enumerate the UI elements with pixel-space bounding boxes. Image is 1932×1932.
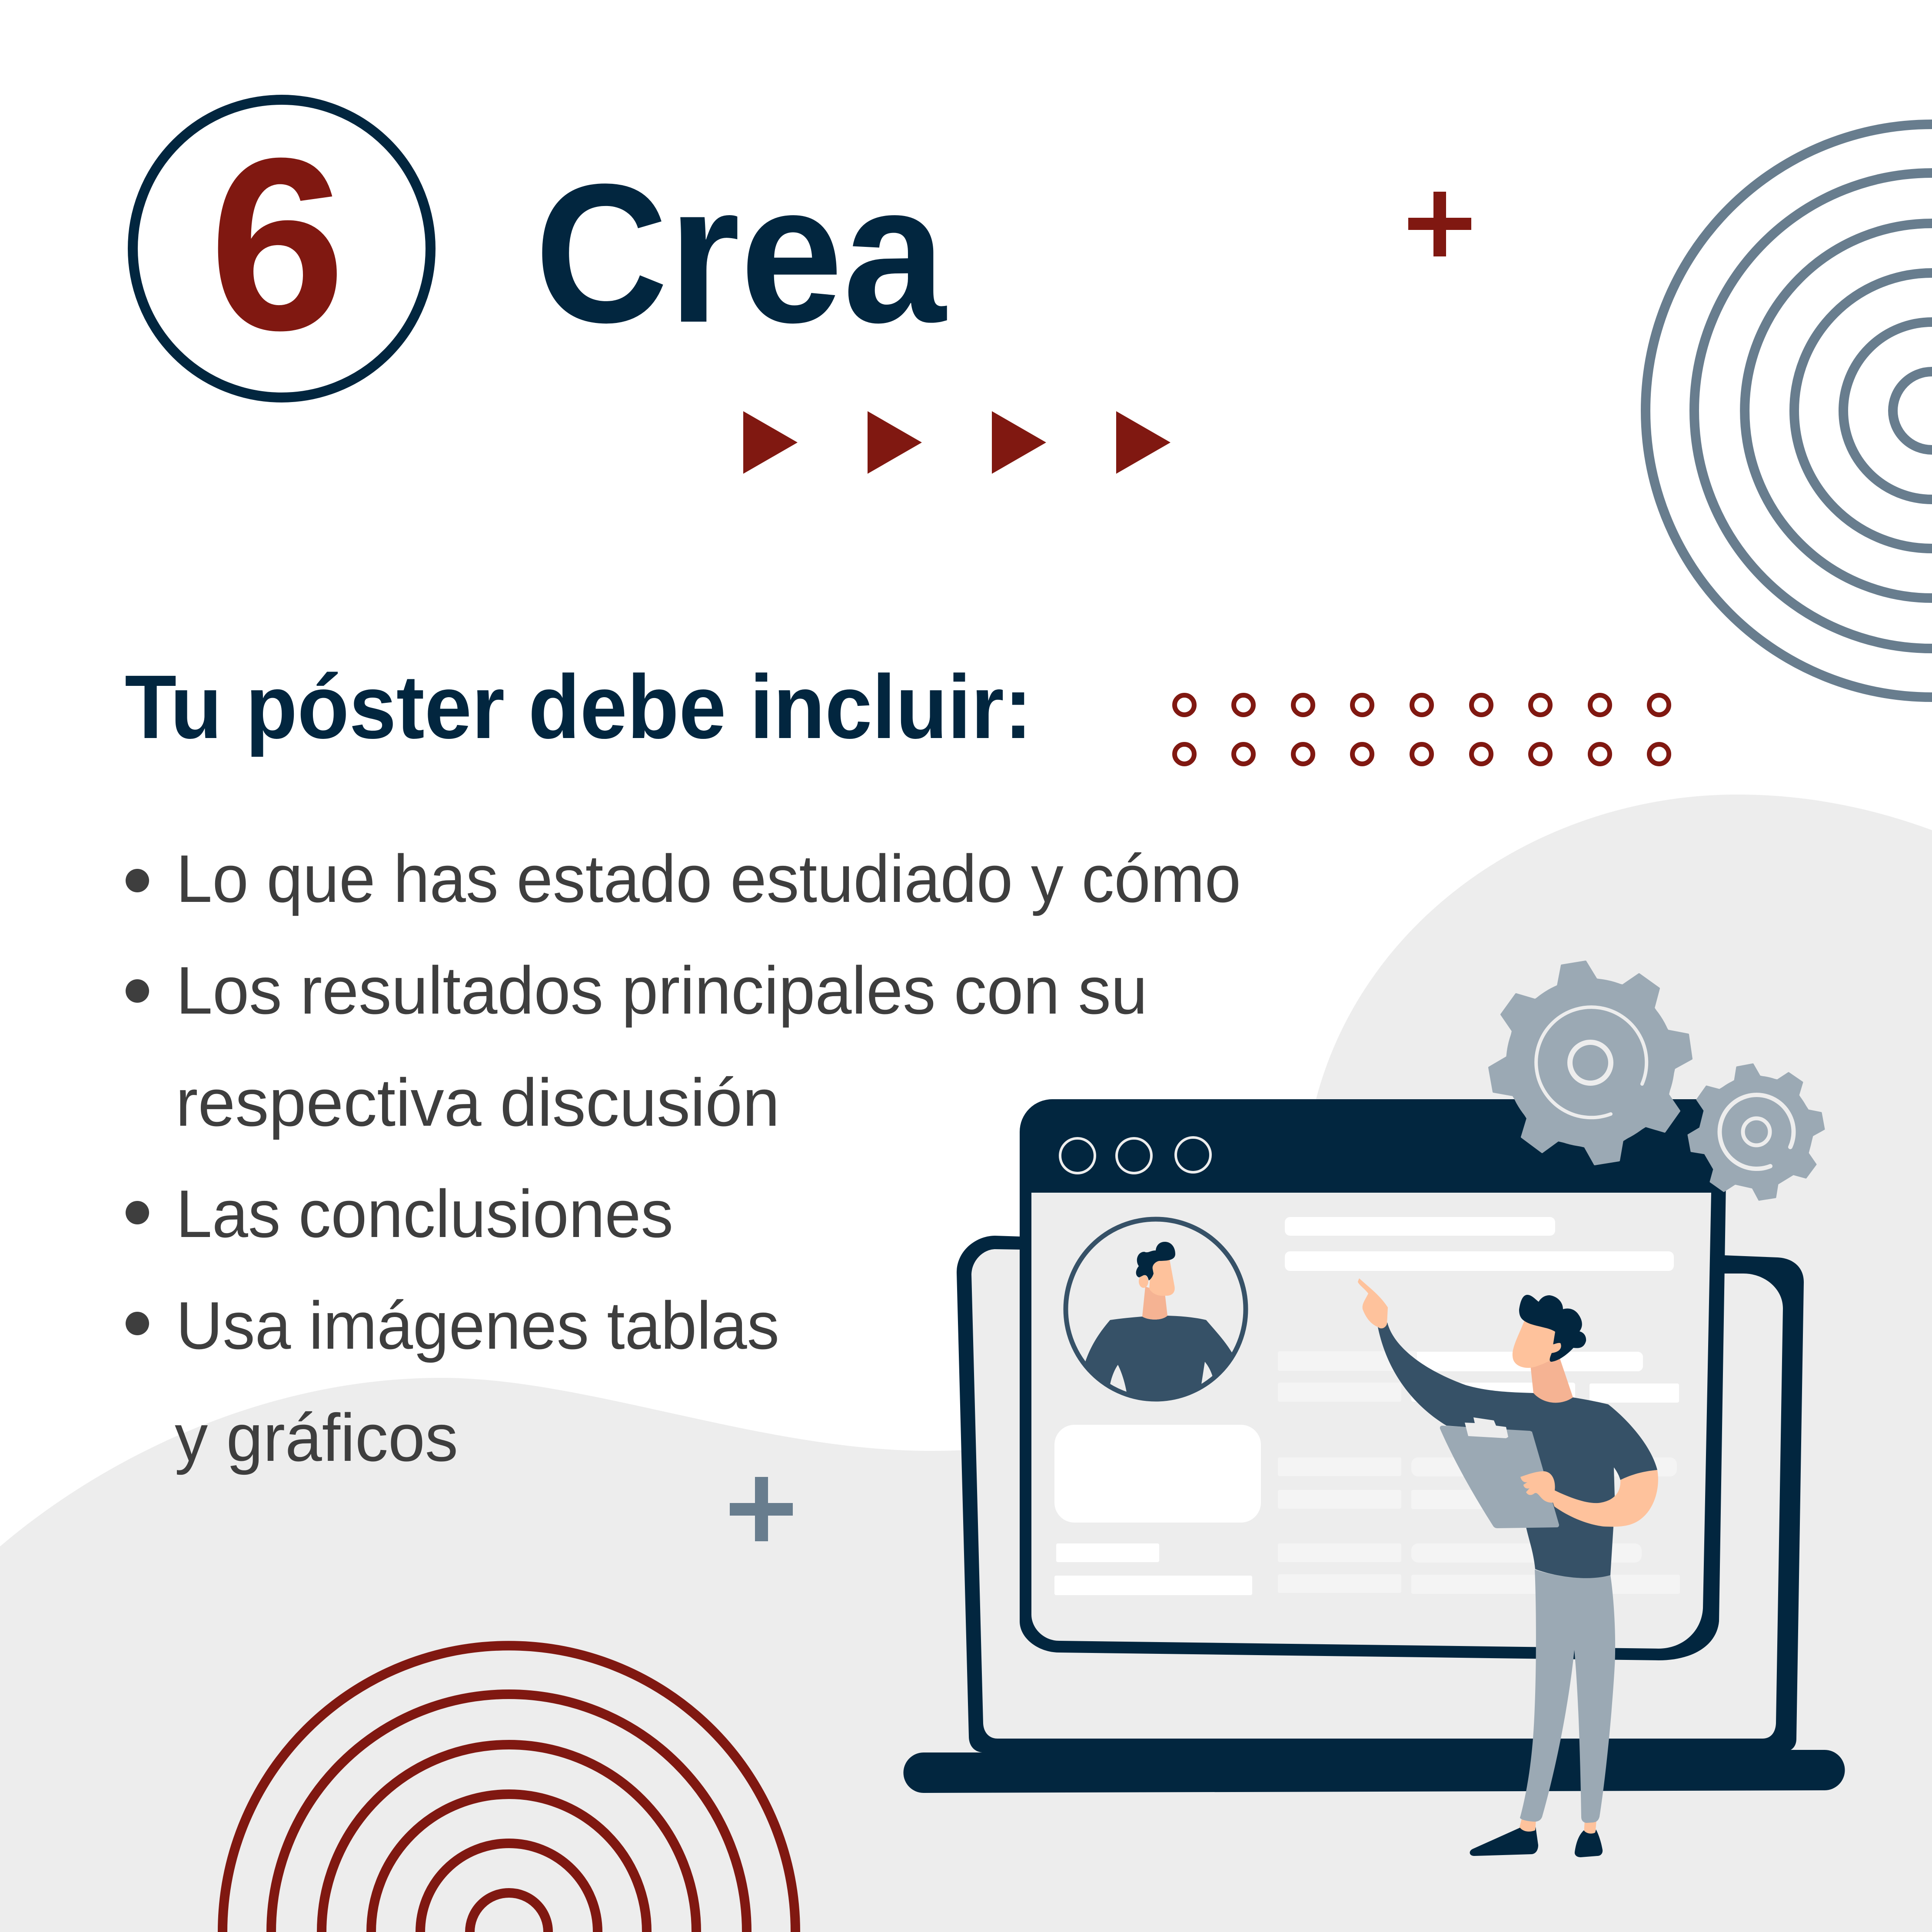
window buttons [1060, 1137, 1210, 1173]
background: grey wave and blob [0, 795, 1932, 1932]
dot grid [1174, 695, 1669, 764]
light placeholders [1278, 1351, 1680, 1594]
laptop [903, 1236, 1845, 1793]
icon: small gear [1688, 1064, 1824, 1200]
holding arm and hand [1520, 1470, 1658, 1527]
torso and raised arm [1378, 1323, 1657, 1578]
arrows [743, 411, 1171, 474]
concentric rings: top right [1646, 124, 1932, 697]
avatar portrait [1066, 1219, 1246, 1399]
bullet list: Usa imágenes tablas [176, 1288, 779, 1363]
step number badge [133, 100, 430, 397]
bullet list: Las conclusiones [176, 1176, 673, 1251]
standing man [1358, 1278, 1658, 1857]
hair [1519, 1295, 1586, 1362]
title: Crea [535, 143, 947, 364]
step number badge: 6 [209, 107, 346, 381]
bullet list [126, 841, 1241, 1475]
icon: grey plus [730, 1477, 793, 1541]
clipboard [1440, 1417, 1559, 1528]
pointing hand [1358, 1278, 1388, 1328]
neck [1530, 1356, 1573, 1403]
bullet list: respectiva discusión [176, 1065, 780, 1140]
head [1513, 1317, 1560, 1368]
bullet list: y gráficos [175, 1400, 458, 1475]
icon: large gear [1489, 961, 1692, 1164]
concentric rings: bottom [223, 1646, 795, 1932]
ear [1550, 1343, 1561, 1353]
bullet list: Los resultados principales con su [176, 953, 1147, 1028]
bullet list: Lo que has estado estudiado y cómo [176, 841, 1241, 916]
browser window [1020, 1099, 1727, 1660]
icon: red plus [1408, 192, 1471, 256]
gears [1489, 961, 1824, 1200]
trousers [1520, 1570, 1615, 1823]
content placeholders [1054, 1217, 1679, 1595]
shoes [1470, 1827, 1603, 1857]
heading: Tu póster debe incluir: [125, 657, 1032, 758]
ankles [1519, 1817, 1596, 1835]
